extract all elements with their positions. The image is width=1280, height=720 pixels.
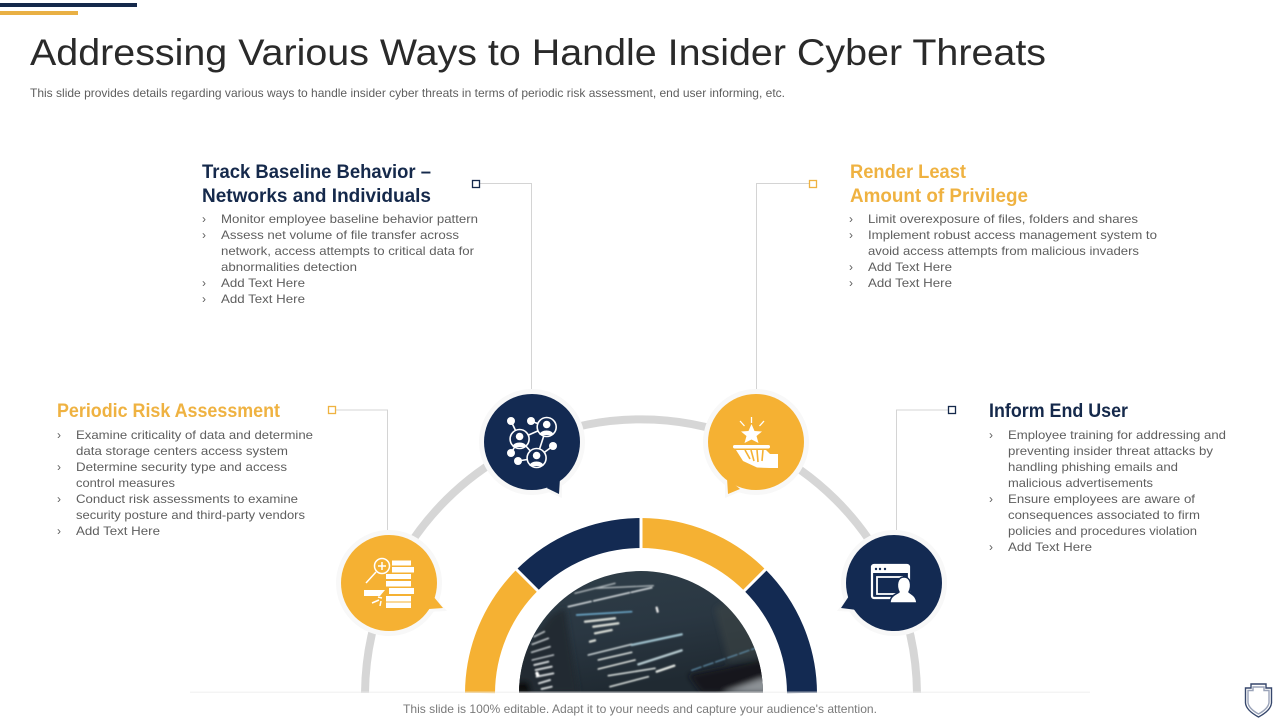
bullet list: track baseline [202, 212, 478, 306]
central segmented ring [480, 515, 802, 693]
panel: render least privilege [849, 162, 1157, 290]
connector: inform end user [896, 406, 956, 530]
bullet list: periodic risk: › [57, 460, 61, 474]
bullet list: render least: › [849, 228, 853, 242]
bullet list: track baseline: › [202, 212, 206, 226]
bullet list: inform end user: policies and procedures violation [1008, 524, 1197, 538]
bullet list: track baseline: › [202, 228, 206, 242]
bullet list: periodic risk: data storage centers access system [76, 444, 288, 458]
panel: inform end user [989, 401, 1226, 554]
bullet list: periodic risk: control measures [76, 476, 175, 490]
bullet list: periodic risk: Conduct risk assessments to examine [76, 492, 298, 506]
heading: track baseline: Networks and Individuals [202, 186, 431, 207]
bullet list: inform end user: malicious advertisements [1008, 476, 1153, 490]
connector: track baseline [472, 180, 532, 390]
heading: render least [850, 162, 1028, 207]
bullet list: periodic risk: › [57, 492, 61, 506]
bullet list: track baseline: Assess net volume of file transfer across [221, 228, 459, 242]
heading: periodic risk: Periodic Risk Assessment [57, 401, 281, 422]
subtitle: This slide provides details regarding various ways to handle insider cyber threats in terms of periodic risk assessment, end user informing, etc. [30, 86, 785, 100]
footer note: This slide is 100% editable. Adapt it to your needs and capture your audience's attention. [403, 702, 877, 716]
bullet list: render least: › [849, 276, 853, 290]
bullet list: render least [849, 212, 1157, 290]
bullet list: periodic risk: Add Text Here [76, 524, 160, 538]
bullet list: inform end user: › [989, 540, 993, 554]
icon: shield logo [1246, 684, 1272, 717]
bullet list: render least: Implement robust access management system to [868, 228, 1157, 242]
panel: track baseline behavior [202, 162, 478, 306]
title: Addressing Various Ways to Handle Insider Cyber Threats [30, 31, 1046, 73]
bullet list: periodic risk: security posture and third-party vendors [76, 508, 305, 522]
bullet list: track baseline: Add Text Here [221, 276, 305, 290]
bullet list: track baseline: Add Text Here [221, 292, 305, 306]
bullet list: periodic risk: › [57, 524, 61, 538]
heading: track baseline: Track Baseline Behavior – [202, 162, 431, 183]
icon: data stack bubble [336, 530, 447, 636]
connector: periodic risk [328, 406, 388, 530]
heading: track baseline [202, 162, 431, 207]
icon: star on hand bubble [703, 389, 809, 498]
bullet list: inform end user: › [989, 492, 993, 506]
bullet list: track baseline: › [202, 292, 206, 306]
bullet list: track baseline: Monitor employee baseline behavior pattern [221, 212, 478, 226]
bullet list: render least: Limit overexposure of files, folders and shares [868, 212, 1138, 226]
icon: network bubble [479, 389, 585, 498]
bullet list: render least: avoid access attempts from malicious invaders [868, 244, 1139, 258]
bullet list: periodic risk [57, 428, 313, 538]
bullet list: periodic risk: Examine criticality of data and determine [76, 428, 313, 442]
connector: render least privilege [756, 180, 816, 390]
bullet list: inform end user: › [989, 428, 993, 442]
heading: inform end user: Inform End User [989, 401, 1129, 422]
bullet list: periodic risk: › [57, 428, 61, 442]
bullet list: inform end user: Employee training for addressing and [1008, 428, 1226, 442]
bullet list: track baseline: › [202, 276, 206, 290]
panel: periodic risk assessment [57, 401, 313, 538]
bullet list: inform end user: preventing insider threat attacks by [1008, 444, 1213, 458]
outer grey arc [365, 419, 917, 693]
heading: render least: Amount of Privilege [850, 186, 1028, 207]
bullet list: render least: Add Text Here [868, 260, 952, 274]
heading: render least: Render Least [850, 162, 967, 183]
footer hairline [190, 692, 1090, 693]
bullet list: periodic risk: Determine security type and access [76, 460, 287, 474]
icon: browser user bubble [837, 530, 947, 636]
bullet list: inform end user: Ensure employees are aware of [1008, 492, 1196, 506]
bullet list: inform end user: Add Text Here [1008, 540, 1092, 554]
bullet list: inform end user: consequences associated to firm [1008, 508, 1200, 522]
top accent bars [0, 3, 137, 15]
bullet list: render least: Add Text Here [868, 276, 952, 290]
central photo: code on laptop screen [515, 568, 770, 693]
bullet list: render least: › [849, 212, 853, 226]
bullet list: track baseline: network, access attempts to critical data for [221, 244, 474, 258]
bullet list: inform end user: handling phishing emails and [1008, 460, 1178, 474]
bullet list: inform end user [989, 428, 1226, 554]
bullet list: render least: › [849, 260, 853, 274]
bullet list: track baseline: abnormalities detection [221, 260, 357, 274]
